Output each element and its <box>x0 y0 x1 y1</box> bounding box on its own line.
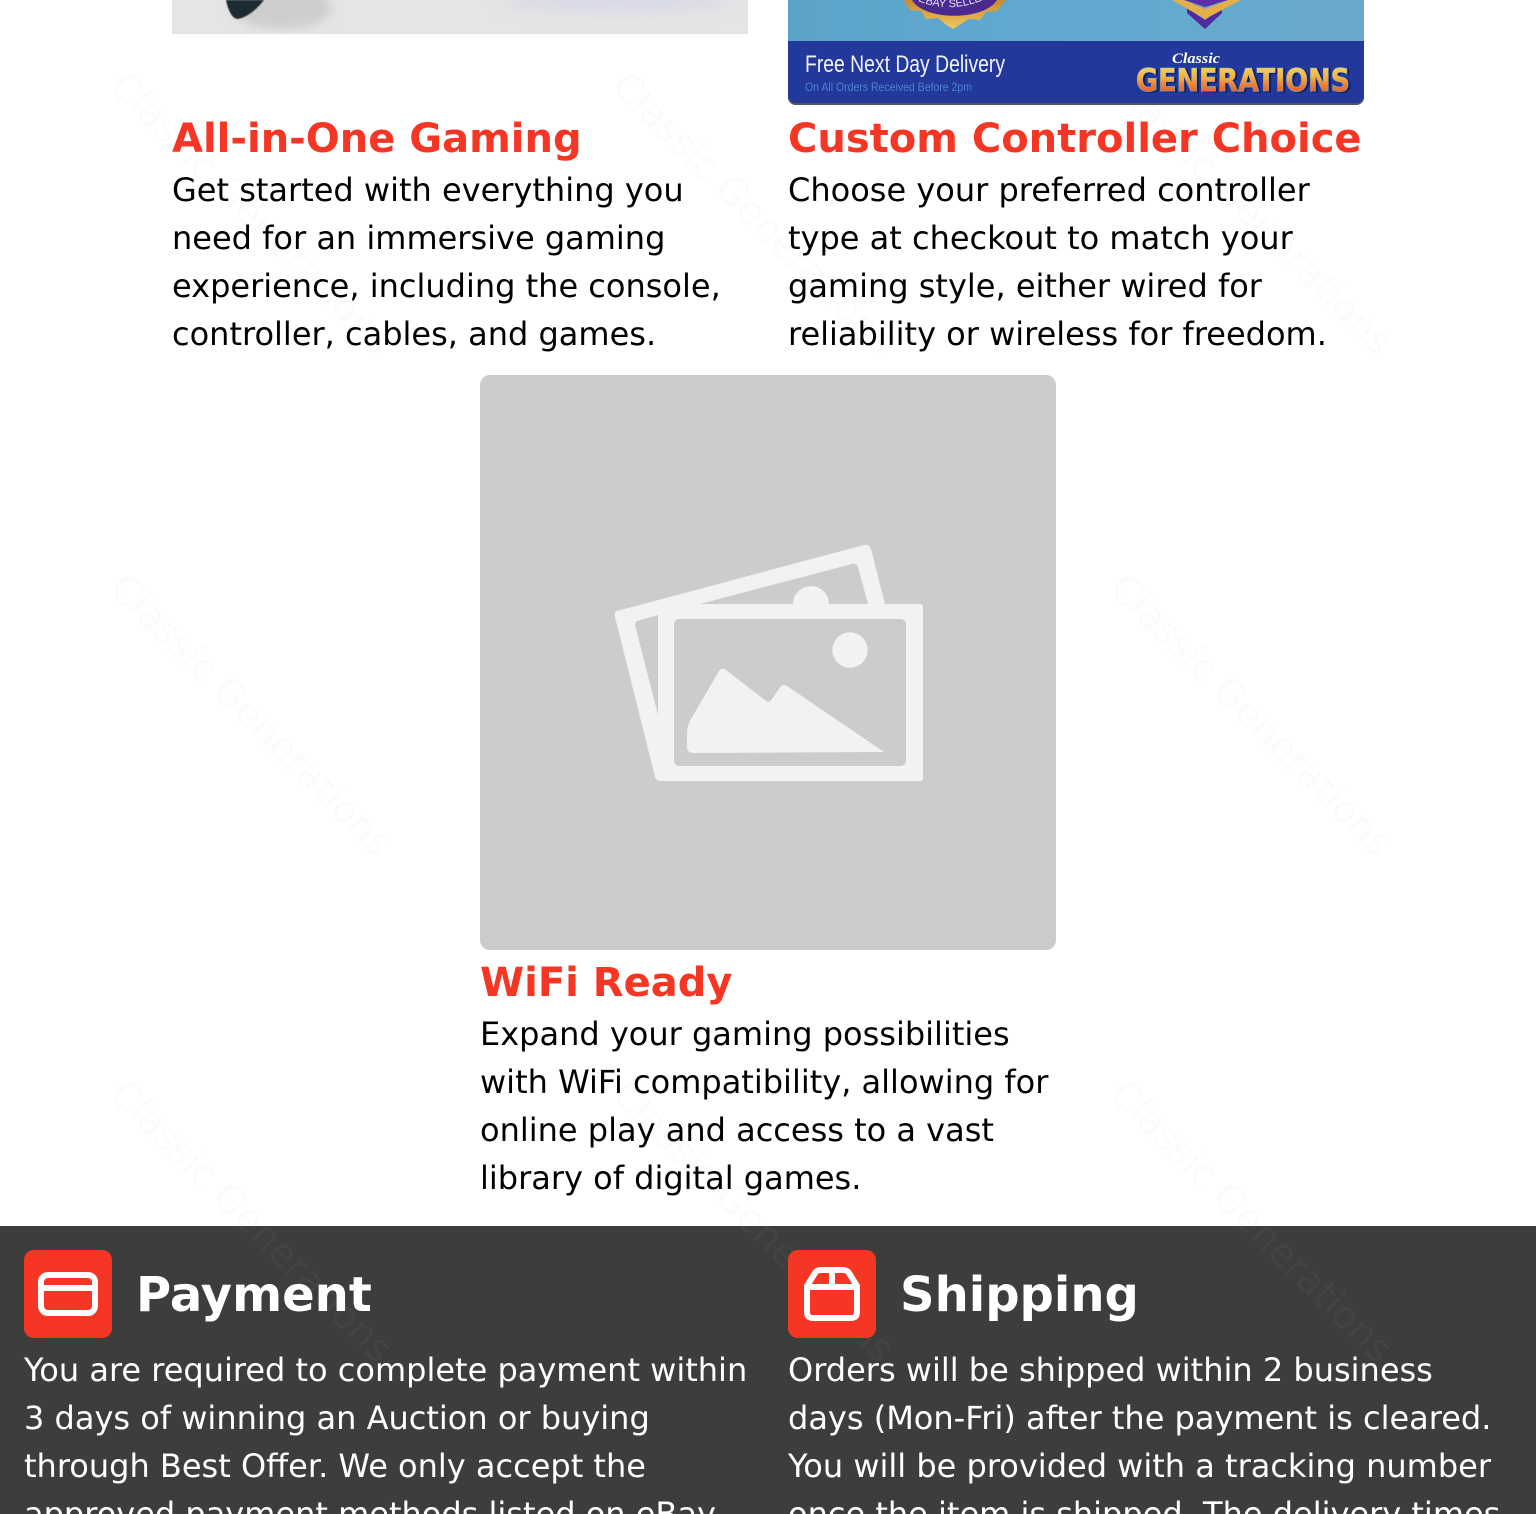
description: library of digital games. <box>480 1159 861 1197</box>
heading: All-in-One Gaming <box>172 116 582 162</box>
watermark: dark area <box>0 1226 1536 1514</box>
watermark: light area: Classic Generations <box>1101 565 1402 866</box>
watermark: light area: Classic Generations <box>101 63 402 364</box>
description: experience, including the console, <box>172 267 721 305</box>
description <box>480 1015 1048 1197</box>
description: gaming style, either wired for <box>788 267 1262 305</box>
badge: chevron <box>1172 0 1241 29</box>
image placeholder <box>480 375 1056 950</box>
description <box>788 171 1327 353</box>
feature: custom controller choice <box>788 116 1362 353</box>
image: store banner <box>788 0 1364 105</box>
badge: seller seal <box>904 0 1006 29</box>
heading: shipping: Shipping <box>900 1267 1139 1323</box>
feature: all-in-one gaming <box>172 116 721 353</box>
text: payment: You are required to complete payment within <box>24 1351 747 1389</box>
description: with WiFi compatibility, allowing for <box>480 1063 1048 1101</box>
banner text: delivery: Free Next Day Delivery <box>805 51 1005 78</box>
text: shipping: days (Mon-Fri) after the payment is cleared. <box>788 1399 1491 1437</box>
footer panel <box>0 1226 1536 1514</box>
description: reliability or wireless for freedom. <box>788 315 1327 353</box>
watermark: light area: Classic Generations <box>1101 63 1402 364</box>
description: Choose your preferred controller <box>788 171 1310 209</box>
icon: payment card <box>24 1250 112 1338</box>
heading: Custom Controller Choice <box>788 116 1362 162</box>
banner logo: classic: Classic <box>1172 51 1220 67</box>
description <box>172 171 721 353</box>
feature: wifi ready <box>480 960 1048 1197</box>
description: online play and access to a vast <box>480 1111 994 1149</box>
description: need for an immersive gaming <box>172 219 665 257</box>
banner text: cutoff: On All Orders Received Before 2pm <box>805 80 972 94</box>
text: payment <box>24 1351 747 1514</box>
text: payment: 3 days of winning an Auction or buying <box>24 1399 650 1437</box>
text: payment: through Best Offer. We only accept the <box>24 1447 646 1485</box>
description: Expand your gaming possibilities <box>480 1015 1010 1053</box>
heading: WiFi Ready <box>480 960 732 1006</box>
heading: payment: Payment <box>136 1267 372 1323</box>
watermark: light area: Classic Generations <box>603 63 904 364</box>
text: shipping: You will be provided with a tracking number <box>788 1447 1491 1485</box>
image: console on white surface <box>172 0 748 34</box>
watermark: light area: Classic Generations <box>101 565 402 866</box>
text: shipping: Orders will be shipped within 2 business <box>788 1351 1433 1389</box>
text: shipping <box>788 1351 1500 1514</box>
description: type at checkout to match your <box>788 219 1293 257</box>
icon: shipping box <box>788 1250 876 1338</box>
description: controller, cables, and games. <box>172 315 656 353</box>
description: Get started with everything you <box>172 171 684 209</box>
